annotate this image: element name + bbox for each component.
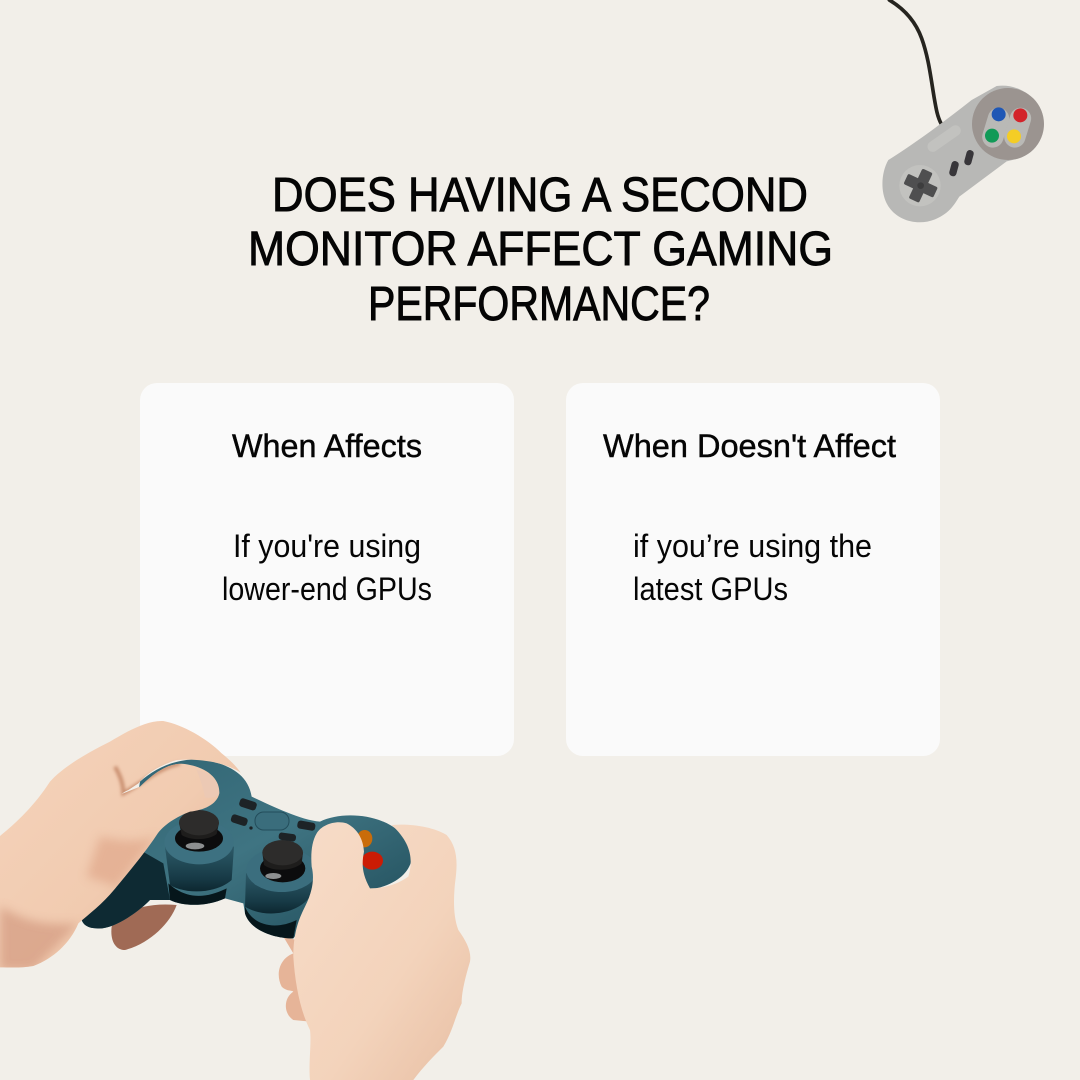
left hand	[0, 721, 241, 970]
right hand	[293, 822, 470, 1080]
text: latest GPUs	[633, 528, 872, 607]
text: lower-end GPUs	[222, 528, 432, 607]
text: lower-end GPUs: lower-end GPUs	[222, 571, 432, 607]
title: DOES HAVING A SECOND	[272, 169, 808, 222]
panel: when doesn't affect	[566, 383, 940, 756]
gamepad	[82, 759, 412, 938]
icon: retro controller with cable	[882, 0, 1044, 222]
face buttons	[230, 798, 316, 842]
left thumbnail	[197, 770, 219, 798]
left hand lower fingers	[111, 904, 177, 950]
title: PERFORMANCE?	[368, 278, 710, 331]
left stick	[164, 810, 234, 891]
title	[248, 169, 833, 331]
title: MONITOR AFFECT GAMING	[248, 223, 833, 276]
text: latest GPUs: latest GPUs	[633, 571, 788, 607]
right hand lower fingers	[279, 937, 317, 1022]
text: lower-end GPUs: If you're using	[233, 528, 421, 564]
heading: when affects: When Affects	[232, 428, 422, 464]
illustration: hands holding gamepad	[0, 721, 470, 1080]
panel: when affects	[140, 383, 514, 756]
heading: when doesn't affect: When Doesn't Affect	[603, 428, 896, 464]
text: latest GPUs: if you’re using the	[633, 528, 872, 564]
right stick	[245, 840, 317, 913]
